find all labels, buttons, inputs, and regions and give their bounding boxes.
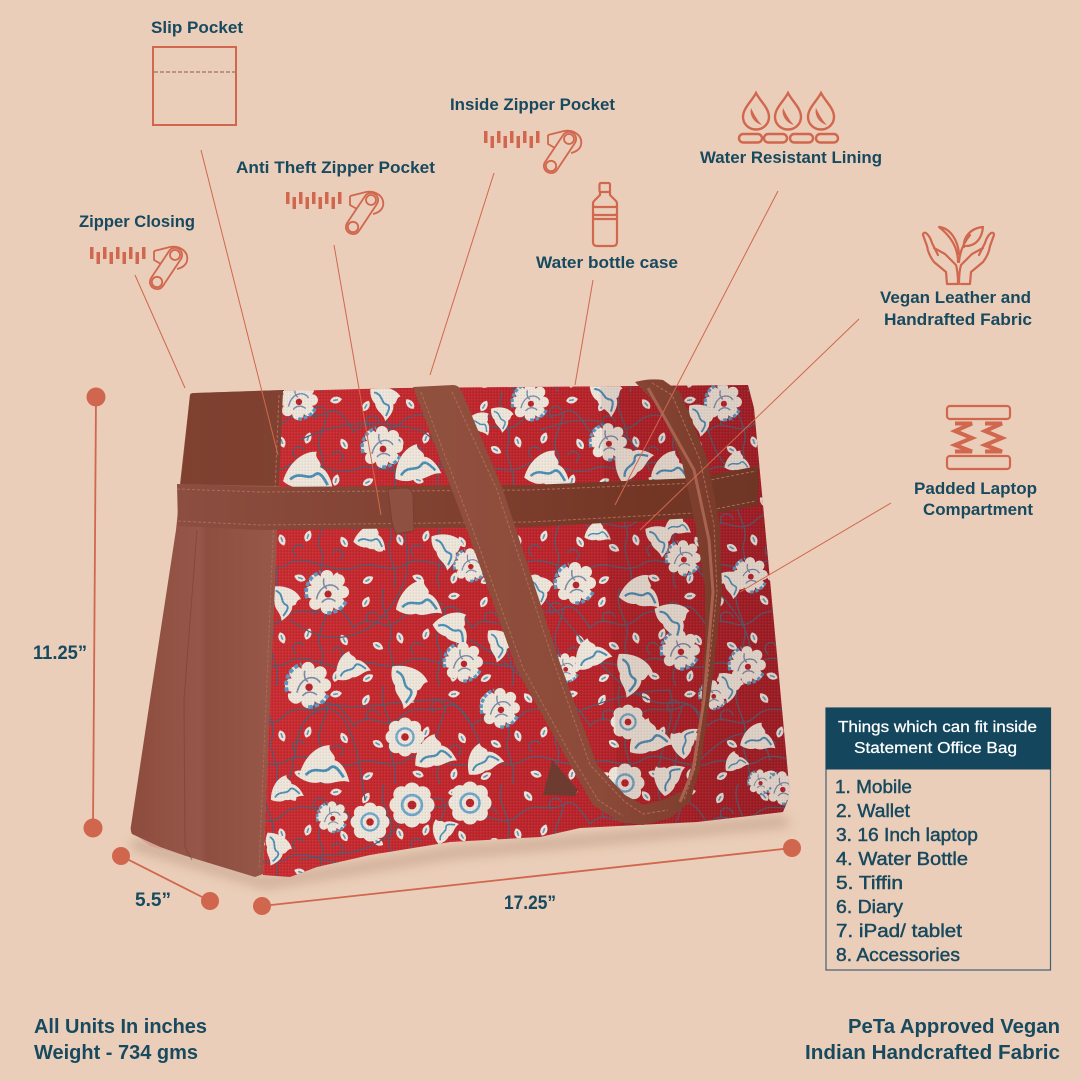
gusset fold line <box>184 530 197 860</box>
icon: water drops <box>739 93 838 142</box>
fabric right shading <box>600 385 800 830</box>
footer right: certification: PeTa Approved Vegan <box>848 1016 1060 1038</box>
panel header <box>826 708 1051 770</box>
icon: zipper <box>286 192 383 232</box>
label: zipper closing: Zipper Closing <box>79 212 195 231</box>
dimension: width: 17.25” <box>504 893 556 914</box>
label: water bottle case <box>536 183 678 272</box>
panel list: 5. Tiffin <box>836 873 903 893</box>
icon: bottle <box>593 183 617 246</box>
label: slip pocket <box>151 18 243 125</box>
panel list: 7. iPad/ tablet <box>836 921 962 941</box>
bag bottom fabric peek <box>132 832 200 860</box>
label: inside zipper pocket: Inside Zipper Pocket <box>450 95 615 114</box>
belt keeper loop <box>388 488 414 534</box>
icon: zipper <box>484 131 581 171</box>
label: vegan leather: Handrafted Fabric <box>884 310 1032 329</box>
panel list: 4. Water Bottle <box>836 849 968 869</box>
label: padded laptop compartment: Padded Laptop <box>914 479 1037 498</box>
label: vegan leather: Vegan Leather and <box>880 288 1031 307</box>
dimension: depth <box>112 847 219 911</box>
panel header: Statement Office Bag <box>854 740 1017 757</box>
print: leaves <box>264 371 775 866</box>
strap stitching <box>421 392 623 816</box>
dimension: height: 11.25” <box>33 643 87 664</box>
label: anti theft zipper pocket: Anti Theft Zipper Pocket <box>236 158 435 177</box>
footer left: units and weight: All Units In inches <box>34 1016 207 1038</box>
strap inner highlight <box>648 388 713 802</box>
leather logo tag <box>543 760 578 796</box>
waist belt <box>177 466 758 534</box>
print: round flowers <box>351 705 645 841</box>
label: water resistant lining <box>700 93 882 167</box>
leader lines <box>135 150 891 592</box>
footer left: units and weight <box>34 1016 207 1064</box>
panel list: 2. Wallet <box>836 801 910 821</box>
panel list: 8. Accessories <box>836 945 960 965</box>
footer right: certification: Indian Handcrafted Fabric <box>805 1042 1060 1064</box>
panel list: 3. 16 Inch laptop <box>836 825 978 845</box>
label: zipper closing <box>79 212 195 287</box>
label: vegan leather <box>880 227 1032 329</box>
icon: zipper <box>90 247 187 287</box>
panel list <box>835 777 978 965</box>
icon: hands holding plant <box>923 227 994 284</box>
front seam stitching <box>259 395 279 870</box>
label: anti theft zipper pocket <box>236 158 435 232</box>
bag top leather shade <box>180 390 284 486</box>
dimension: height <box>33 388 106 838</box>
footer left: units and weight: Weight - 734 gms <box>34 1042 198 1064</box>
label: water resistant lining: Water Resistant Lining <box>700 148 882 167</box>
label: slip pocket: Slip Pocket <box>151 18 243 37</box>
panel header: Things which can fit inside <box>838 719 1037 736</box>
illustration: tote bag <box>131 371 800 885</box>
label: inside zipper pocket <box>450 95 615 171</box>
bag leather side gusset <box>131 390 284 877</box>
footer right: certification <box>805 1016 1060 1064</box>
label: padded laptop compartment: Compartment <box>923 500 1033 519</box>
label: padded laptop compartment <box>914 406 1037 519</box>
fabric front panel with kalamkari print <box>255 371 800 885</box>
panel: things which fit inside <box>826 708 1051 970</box>
panel list: 6. Diary <box>836 897 903 917</box>
icon: slip pocket <box>153 47 236 125</box>
dimension: width <box>253 839 801 915</box>
icon: spring padding <box>947 406 1010 469</box>
print: peony flowers <box>278 380 799 833</box>
panel list: 1. Mobile <box>835 777 912 797</box>
label: water bottle case: Water bottle case <box>536 253 678 272</box>
dimension: depth: 5.5” <box>135 890 171 911</box>
print: vines <box>285 410 770 860</box>
shoulder straps <box>413 379 722 825</box>
bag floor shadow <box>130 816 790 888</box>
